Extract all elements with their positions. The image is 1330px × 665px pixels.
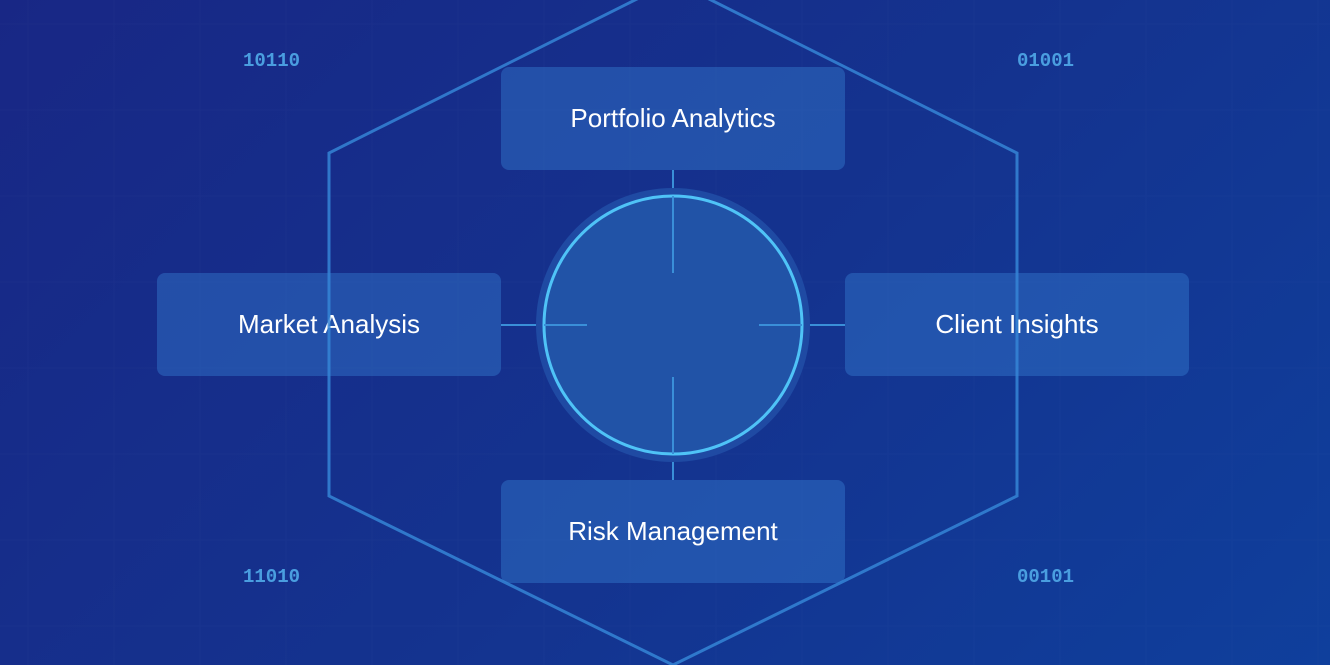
binary label top-right: 01001 (1017, 50, 1074, 72)
box: Portfolio Analytics (501, 67, 845, 170)
binary label bottom-right: 00101 (1017, 566, 1074, 588)
box: Portfolio Analytics: Portfolio Analytics (570, 103, 776, 133)
binary label bottom-left: 11010 (243, 566, 300, 588)
box: Risk Management: Risk Management (568, 516, 778, 546)
box: Risk Management (501, 480, 845, 583)
binary label top-left: 10110 (243, 50, 300, 72)
box: Market Analysis (157, 273, 501, 376)
box: Market Analysis: Market Analysis (238, 309, 420, 339)
box: Client Insights (845, 273, 1189, 376)
box: Client Insights: Client Insights (935, 309, 1099, 339)
